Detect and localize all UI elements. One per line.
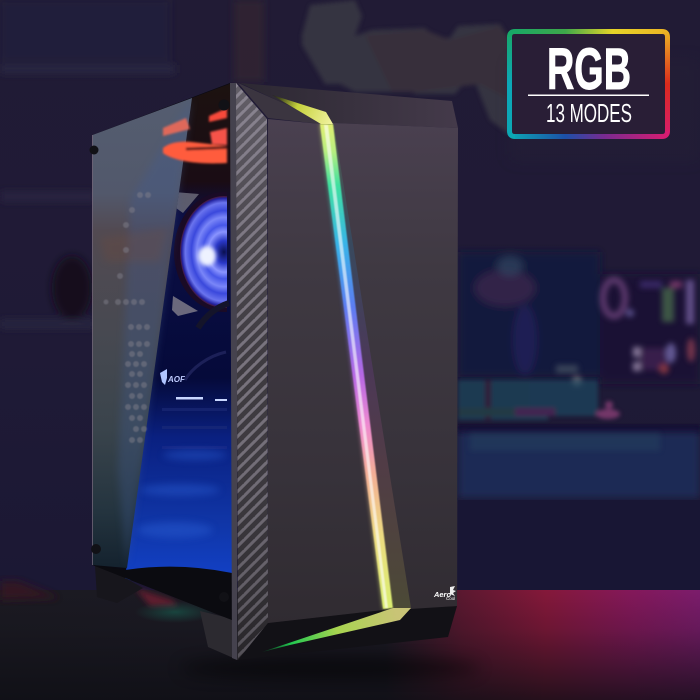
blurred keyboard [458,380,620,420]
table surface [0,581,700,700]
blurred hexagon wall light [302,0,510,135]
frosted reflection [92,98,192,568]
base [238,606,457,660]
case interior [125,84,232,580]
aerocool logo: Aero [433,590,451,599]
aerocool logo: Cool [446,596,455,601]
rgb light strip [262,95,411,652]
badge panel [509,31,668,137]
front right panel [333,123,458,609]
left shelves [0,0,264,328]
case feet [95,566,238,660]
cables and logo: AOF [167,375,186,384]
fan [172,192,227,316]
reflected dots [104,192,151,443]
red lights [163,108,227,163]
blurred neon readout [556,280,695,386]
case top surface [240,83,458,128]
carbon fibre strip [236,83,268,660]
badge rainbow border [510,32,668,136]
cables and logo [160,303,229,449]
badge: RGB 13 modes [509,31,668,137]
badge title: RGB [547,37,631,102]
blue clouds [137,450,227,538]
badge subtitle: 13 MODES [546,98,632,128]
side glass panel [92,83,232,620]
blurred desk mat [458,432,700,498]
aerocool logo [433,586,456,601]
bevel beside rgb strip [331,123,411,608]
glass screws [90,100,230,602]
front edge strip [230,83,237,660]
blurred monitor [458,252,700,384]
pc case [90,80,458,660]
glass bottom band [92,565,232,620]
front left panel [268,119,383,623]
